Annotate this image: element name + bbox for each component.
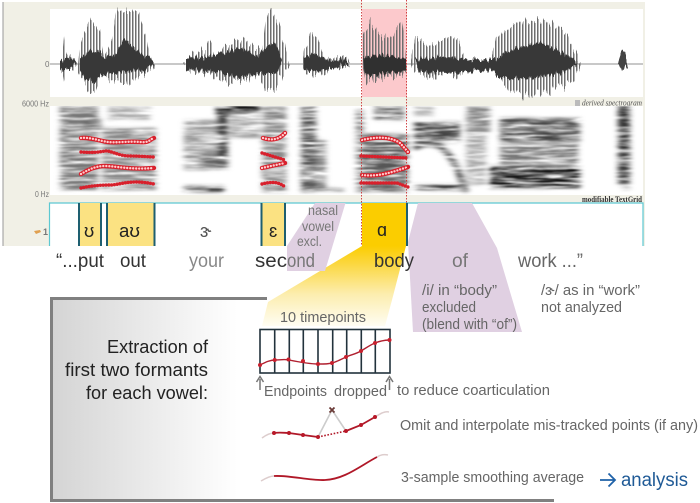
note: /ɝ/ not analyzed xyxy=(541,282,640,316)
transcript words: of xyxy=(452,250,469,272)
panel heading: for each vowel: xyxy=(86,382,208,403)
note: /i/ excluded: (blend with “of”) xyxy=(422,316,517,333)
track group: target vowel xyxy=(361,138,408,187)
panel: formant extraction xyxy=(52,298,554,500)
spectrogram xyxy=(50,104,643,195)
endpoints caption xyxy=(264,382,550,400)
endpoints caption: Endpoints xyxy=(264,383,327,400)
endpoints caption: to reduce coarticulation xyxy=(397,382,550,399)
smoothing caption: 3-sample smoothing average xyxy=(401,469,584,486)
nasal vowel note xyxy=(297,202,338,249)
arrow: left endpoint xyxy=(256,376,264,390)
note: /i/ excluded: excluded xyxy=(422,299,476,316)
vowel labels (IPA): ɛ xyxy=(269,221,277,241)
waveform xyxy=(50,11,643,95)
axis labels: 6000 Hz xyxy=(22,100,49,108)
vowel intervals xyxy=(80,203,285,246)
tier number with hand icon: 1 xyxy=(43,227,48,237)
highlighted vowel band xyxy=(362,9,407,97)
arrow: right endpoint xyxy=(386,376,393,390)
timepoint grid chart xyxy=(258,330,392,373)
transcript words: ond xyxy=(287,250,315,272)
software window frame xyxy=(2,2,645,246)
TextGrid tier xyxy=(49,203,643,246)
exclusion shape: body/of xyxy=(408,203,522,332)
label: 10 timepoints: 10 timepoints xyxy=(280,309,366,326)
transcript words: out xyxy=(120,250,147,272)
endpoints caption: dropped xyxy=(334,383,387,400)
transcript words: “...put xyxy=(56,250,105,272)
interval boundaries xyxy=(78,203,408,246)
vowel labels (IPA): ɑ xyxy=(377,220,387,240)
panel heading xyxy=(65,336,209,403)
vowel labels (IPA): ɝ xyxy=(200,221,212,241)
note: /ɝ/ not analyzed: /ɝ/ as in “work” xyxy=(541,282,640,299)
note: /i/ excluded: /i/ in “body” xyxy=(422,282,497,299)
formant tracks xyxy=(81,133,408,188)
waveform panel xyxy=(50,9,643,97)
tier number with hand icon xyxy=(34,227,48,237)
axis labels: 0 Hz xyxy=(35,190,49,199)
axis labels xyxy=(22,60,50,199)
label: modifiable TextGrid: modifiable TextGrid xyxy=(582,195,642,204)
note: /ɝ/ not analyzed: not analyzed xyxy=(541,299,622,316)
nasal vowel note: nasal xyxy=(308,202,338,218)
transcript words xyxy=(56,250,583,272)
label: derived spectrogram: derived spectrogram xyxy=(582,98,642,108)
vowel labels (IPA): ʊ xyxy=(84,221,94,241)
smoothed curve xyxy=(261,455,388,481)
nasal vowel note: excl. xyxy=(297,233,322,249)
transcript words: sec xyxy=(255,250,287,272)
vowel labels (IPA): aʊ xyxy=(119,221,140,241)
panel heading: first two formants xyxy=(65,359,208,380)
selected interval xyxy=(362,203,407,246)
track group: first vowels xyxy=(81,138,154,188)
track group: second vowel xyxy=(262,133,285,187)
exclusion shape: nasal vowel xyxy=(287,203,346,271)
panel heading: Extraction of xyxy=(107,336,209,357)
vowel labels (IPA) xyxy=(84,220,387,241)
selection dotted lines xyxy=(362,0,406,246)
transcript words: body xyxy=(374,250,414,272)
axis labels: 0 xyxy=(45,60,50,69)
transcript words: your xyxy=(189,250,224,272)
transcript words: work ...” xyxy=(517,250,583,272)
note: /i/ excluded xyxy=(422,282,517,333)
arrow to analysis: analysis xyxy=(621,470,688,491)
callout: yellow zoom wedge xyxy=(262,246,406,326)
mis-tracked points curve xyxy=(262,408,389,439)
nasal vowel note: vowel xyxy=(302,218,334,234)
